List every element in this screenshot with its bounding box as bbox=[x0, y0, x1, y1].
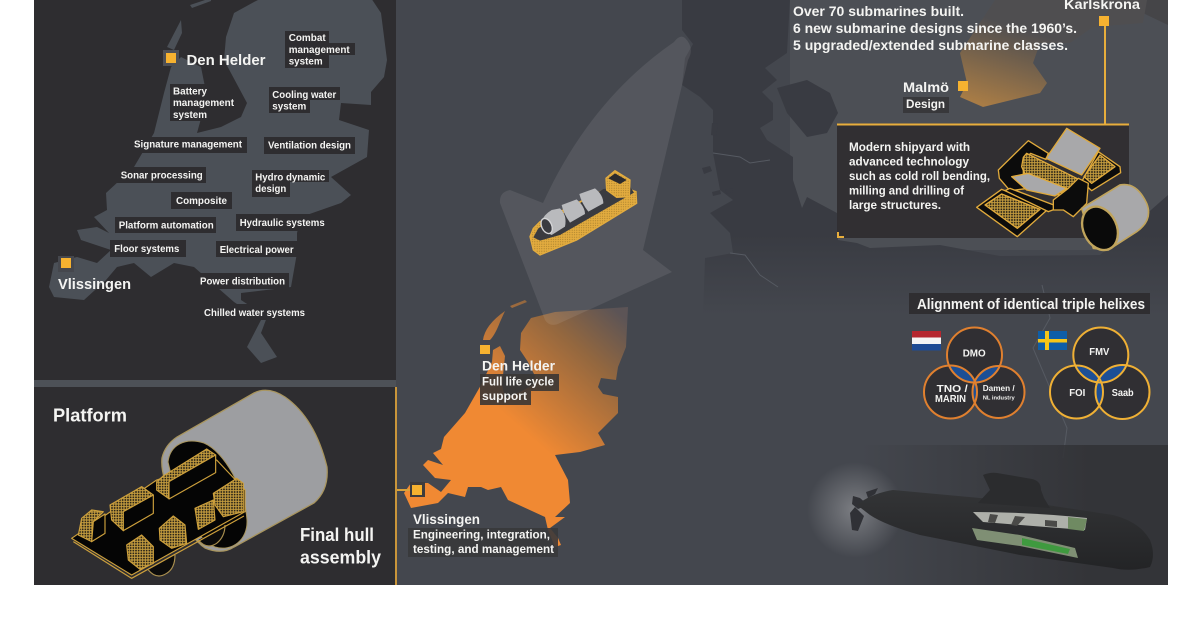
text block: submarine track record: 6 new submarine designs since the 1960’s. bbox=[793, 21, 1077, 36]
labels: system expertise: Composite bbox=[176, 195, 227, 207]
panel: Karlskrona shipyard bbox=[837, 124, 1129, 238]
illustration: submarine cutaway bbox=[807, 462, 1153, 570]
divider strip between left panels bbox=[34, 380, 396, 387]
heading: Final hull assembly: assembly bbox=[300, 548, 381, 568]
icon: roll bending machine bbox=[977, 128, 1149, 256]
marker and label: Den Helder bbox=[480, 345, 559, 405]
labels: system expertise: Floor systems bbox=[114, 243, 179, 255]
marker and label: Vlissingen: testing, and management bbox=[413, 542, 554, 556]
river border line bbox=[713, 153, 1067, 458]
text block: shipyard description: such as cold roll bending, bbox=[849, 171, 990, 183]
labels: system expertise: Chilled water systems bbox=[204, 307, 305, 319]
text block: submarine track record: 5 upgraded/extended submarine classes. bbox=[793, 38, 1068, 53]
heading: Final hull assembly: Final hull bbox=[300, 525, 374, 545]
heading: Platform: Platform bbox=[53, 406, 127, 426]
map: northern Europe land masses bbox=[682, 0, 1168, 260]
marker: Den Helder: Den Helder bbox=[186, 52, 266, 69]
labels: system expertise: Combat bbox=[289, 32, 326, 44]
illustration: platform modules bbox=[72, 449, 245, 578]
diagram: Dutch triple helix: Damen / bbox=[983, 383, 1015, 393]
diagram: Swedish triple helix: FMV bbox=[1089, 346, 1109, 358]
map: southern Sweden bbox=[960, 0, 1147, 107]
diagram: Dutch triple helix bbox=[924, 328, 1024, 418]
marker: Vlissingen: Vlissingen bbox=[58, 276, 131, 293]
illustration: hull cylinder bbox=[162, 390, 327, 551]
text block: shipyard description: advanced technology bbox=[849, 156, 970, 168]
marker: Vlissingen bbox=[58, 256, 131, 293]
marker and label: Den Helder: Den Helder bbox=[482, 358, 556, 374]
diagram: Dutch triple helix: TNO / bbox=[937, 383, 968, 395]
marker and label: Vlissingen bbox=[396, 482, 558, 557]
map: Netherlands silhouette bbox=[49, 0, 387, 363]
diagram: Dutch triple helix: NL industry bbox=[983, 396, 1015, 402]
labels: system expertise: system bbox=[173, 109, 207, 121]
diagram: Swedish triple helix: Saab bbox=[1112, 387, 1134, 399]
labels: system expertise: Sonar processing bbox=[121, 170, 203, 182]
marker: Den Helder bbox=[163, 50, 266, 66]
labels: system expertise: system bbox=[272, 100, 306, 112]
panel: central map bbox=[396, 0, 1168, 585]
marker and label: Karlskrona bbox=[1064, 0, 1140, 125]
text block: shipyard description: milling and drilling of bbox=[849, 186, 964, 198]
diagram: Swedish triple helix: FOI bbox=[1069, 387, 1085, 399]
labels: system expertise: Cooling water bbox=[272, 89, 336, 101]
labels: system expertise: Ventilation design bbox=[268, 140, 351, 152]
icon: Swedish flag bbox=[1038, 331, 1067, 350]
marker and label: Den Helder: Full life cycle bbox=[482, 374, 554, 388]
labels: system expertise: design bbox=[255, 183, 286, 195]
labels: system expertise: system bbox=[289, 56, 323, 68]
diagram: Dutch triple helix: DMO bbox=[963, 348, 986, 360]
map: Netherlands bbox=[404, 300, 628, 547]
marker and label: Den Helder: support bbox=[482, 389, 527, 403]
marker and label: Vlissingen: Vlissingen bbox=[413, 511, 480, 527]
panel: platform and final hull assembly bbox=[34, 387, 397, 585]
text block: shipyard description bbox=[849, 142, 990, 212]
icon: Dutch flag bbox=[912, 331, 941, 350]
submarine panel background bbox=[945, 445, 1168, 585]
text block: submarine track record: Over 70 submarines built. bbox=[793, 4, 964, 19]
labels: system expertise: management bbox=[173, 97, 234, 109]
text block: shipyard description: large structures. bbox=[849, 200, 941, 212]
labels: system expertise: Hydro dynamic bbox=[255, 172, 325, 184]
icon: cargo ship bbox=[530, 171, 637, 255]
marker and label: Malmö bbox=[903, 79, 968, 113]
labels: system expertise: Platform automation bbox=[119, 220, 214, 232]
labels: system expertise: management bbox=[289, 44, 350, 56]
text block: submarine track record bbox=[793, 4, 1077, 53]
labels: system expertise: Signature management bbox=[134, 138, 242, 150]
labels: system expertise bbox=[110, 31, 355, 320]
marker and label: Malmö: Malmö bbox=[903, 79, 949, 95]
labels: system expertise: Hydraulic systems bbox=[240, 217, 325, 229]
labels: system expertise: Battery bbox=[173, 86, 207, 98]
marker and label: Malmö: Design bbox=[906, 99, 945, 111]
heading: triple helixes: Alignment of identical triple helixes bbox=[917, 297, 1145, 313]
diagram: Dutch triple helix: MARIN bbox=[935, 393, 966, 405]
labels: system expertise: Power distribution bbox=[200, 276, 285, 288]
panel: design expertise map bbox=[34, 0, 396, 380]
light beam from Sweden to the Netherlands bbox=[500, 37, 691, 325]
heading: Final hull assembly bbox=[300, 525, 381, 568]
labels: system expertise: Electrical power bbox=[220, 244, 294, 256]
text block: shipyard description: Modern shipyard with bbox=[849, 142, 970, 154]
marker and label: Vlissingen: Engineering, integration, bbox=[413, 528, 550, 542]
diagram: Swedish triple helix bbox=[1050, 328, 1150, 419]
